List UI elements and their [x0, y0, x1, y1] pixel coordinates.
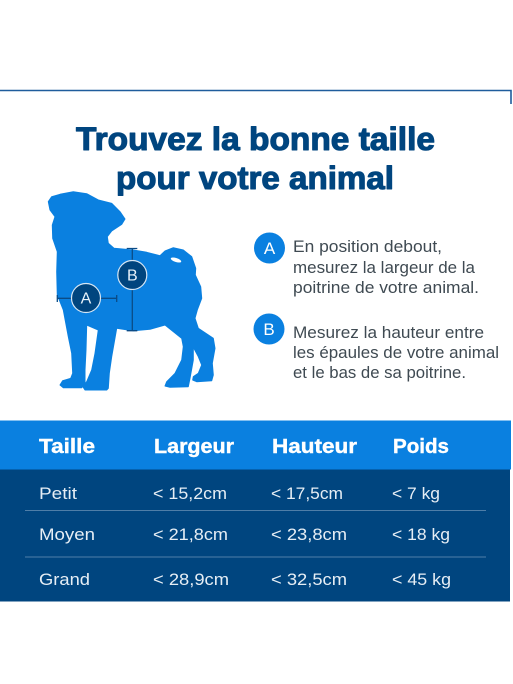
row: Grand: < 32,5cm	[271, 570, 347, 589]
measure line A	[57, 295, 117, 302]
instruction A	[293, 238, 479, 297]
row: Petit: Petit	[39, 484, 77, 503]
row: Petit: < 15,2cm	[153, 484, 227, 503]
table header: Hauteur	[272, 436, 357, 458]
dog diagram	[48, 192, 215, 390]
badge A: A	[264, 239, 276, 258]
instruction A: poitrine de votre animal.	[293, 279, 479, 297]
row: Grand: Grand	[39, 570, 90, 589]
row: Grand	[39, 570, 451, 589]
marker A	[72, 284, 100, 312]
instruction B: et le bas de sa poitrine.	[293, 364, 466, 382]
marker B	[118, 260, 147, 290]
title: Trouvez la bonne taille	[76, 121, 435, 157]
instruction A: mesurez la largeur de la	[293, 259, 476, 277]
size table	[0, 420, 511, 602]
row: Grand: < 28,9cm	[153, 570, 229, 589]
row: Petit	[39, 484, 440, 503]
instruction B: les épaules de votre animal	[293, 344, 499, 362]
table body	[0, 470, 510, 602]
icon: dog silhouette	[48, 192, 215, 390]
row: Moyen: < 21,8cm	[153, 525, 228, 544]
top border line	[0, 90, 511, 104]
marker B: B	[127, 268, 138, 284]
row: Moyen: < 23,8cm	[271, 525, 347, 544]
row: Petit: < 7 kg	[392, 484, 440, 503]
table header: Largeur	[154, 436, 234, 458]
measure line B	[127, 248, 137, 331]
instruction B	[293, 324, 499, 382]
table header: Poids	[393, 436, 449, 458]
row: Moyen: Moyen	[39, 525, 95, 544]
table header	[0, 420, 511, 470]
marker A: A	[81, 290, 92, 308]
title: pour votre animal	[116, 160, 394, 196]
title	[76, 121, 435, 196]
row: Moyen	[39, 525, 450, 544]
badge B: B	[263, 320, 275, 339]
badge A	[254, 232, 285, 264]
row: Moyen: < 18 kg	[392, 525, 450, 544]
row: Grand: < 45 kg	[392, 570, 451, 589]
instruction B: Mesurez la hauteur entre	[293, 324, 484, 342]
badge B	[254, 314, 284, 344]
table header: Taille	[39, 436, 95, 458]
instruction A: En position debout,	[293, 238, 442, 256]
row: Petit: < 17,5cm	[271, 484, 343, 503]
